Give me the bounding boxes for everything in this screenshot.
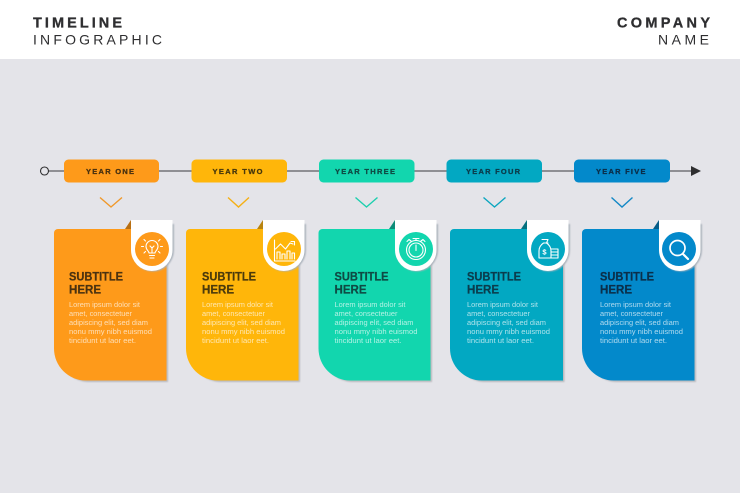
timeline axis with arrow <box>40 166 701 176</box>
chevron: five <box>612 198 632 207</box>
subtitle: HERE <box>467 282 499 296</box>
body text <box>467 300 550 345</box>
body text <box>600 300 683 345</box>
year pill: four: YEAR FOUR <box>466 167 521 176</box>
body text: Lorem ipsum dolor sit <box>600 300 672 309</box>
year pill: two <box>192 160 287 182</box>
white tab <box>660 224 702 272</box>
year pill: five <box>574 160 670 182</box>
body text <box>202 300 285 345</box>
fold <box>125 220 131 229</box>
subtitle: HERE <box>202 282 234 296</box>
title: TIMELINE <box>33 16 122 32</box>
body text: tincidunt ut laor eet. <box>467 336 534 345</box>
body text: Lorem ipsum dolor sit <box>467 300 539 309</box>
body text: amet, consectetuer <box>69 309 132 318</box>
subtitle: SUBTITLE <box>600 270 654 284</box>
body text: amet, consectetuer <box>202 309 265 318</box>
icon: growth chart <box>267 232 301 266</box>
subtitle: SUBTITLE <box>69 270 123 284</box>
body text: nonu mmy nibh euismod <box>202 327 285 336</box>
year pill: two: YEAR TWO <box>212 167 263 176</box>
body text: Lorem ipsum dolor sit <box>202 300 274 309</box>
subtitle: HERE <box>69 282 101 296</box>
chevron: four <box>484 198 506 207</box>
subtitle: SUBTITLE <box>467 270 521 284</box>
year pill: three <box>319 160 414 182</box>
icon: magnifying glass <box>662 232 696 266</box>
body text: amet, consectetuer <box>334 309 398 318</box>
body text: adipiscing elit, sed diam <box>467 318 546 327</box>
white tab <box>396 224 438 272</box>
company name: NAME <box>658 32 709 48</box>
fold <box>653 220 659 229</box>
panel: card five <box>582 220 702 382</box>
white tab <box>264 224 306 272</box>
year pill: five: YEAR FIVE <box>596 167 646 176</box>
white tab <box>528 224 570 272</box>
subtitle: SUBTITLE <box>202 270 256 284</box>
icon: light bulb <box>135 232 169 266</box>
chevron: one <box>100 198 122 207</box>
year pill: one: YEAR ONE <box>86 167 134 176</box>
body text <box>69 300 152 345</box>
body text: adipiscing elit, sed diam <box>334 318 414 327</box>
year pill: one <box>64 160 159 182</box>
panel: card four <box>450 220 570 382</box>
panel: card one <box>54 220 174 382</box>
icon: money bag and coins <box>531 232 565 266</box>
panel: card two <box>186 220 306 382</box>
body text: tincidunt ut laor eet. <box>202 336 269 345</box>
body text: nonu mmy nibh euismod <box>334 327 418 336</box>
year pill: four <box>446 160 542 182</box>
subtitle: HERE <box>334 282 366 296</box>
body text: adipiscing elit, sed diam <box>69 318 148 327</box>
body text: nonu mmy nibh euismod <box>69 327 152 336</box>
title <box>33 16 162 48</box>
year pill: three: YEAR THREE <box>335 167 395 176</box>
body text: adipiscing elit, sed diam <box>600 318 679 327</box>
subtitle <box>467 270 521 296</box>
body text: Lorem ipsum dolor sit <box>334 300 406 309</box>
icon: money bag and coins: $ <box>542 248 547 256</box>
body text: nonu mmy nibh euismod <box>600 327 683 336</box>
body text: adipiscing elit, sed diam <box>202 318 281 327</box>
body text: nonu mmy nibh euismod <box>467 327 550 336</box>
body text <box>334 300 418 345</box>
white tab <box>132 224 174 271</box>
body text: tincidunt ut laor eet. <box>69 336 136 345</box>
subtitle: HERE <box>600 282 632 296</box>
company name: COMPANY <box>617 16 710 32</box>
chevron: two <box>228 198 249 207</box>
icon: stopwatch <box>399 232 433 266</box>
company name <box>617 16 710 48</box>
subtitle <box>334 270 388 296</box>
body text: tincidunt ut laor eet. <box>334 336 402 345</box>
subtitle <box>202 270 256 296</box>
subtitle: SUBTITLE <box>334 270 388 284</box>
fold <box>521 220 527 229</box>
chevron: three <box>356 198 378 207</box>
fold <box>257 220 263 229</box>
subtitle <box>69 270 123 296</box>
body text: amet, consectetuer <box>467 309 530 318</box>
body text: Lorem ipsum dolor sit <box>69 300 141 309</box>
panel: card three <box>318 220 438 382</box>
body text: tincidunt ut laor eet. <box>600 336 667 345</box>
subtitle <box>600 270 654 296</box>
fold <box>389 220 395 229</box>
body text: amet, consectetuer <box>600 309 663 318</box>
title: INFOGRAPHIC <box>33 32 162 48</box>
